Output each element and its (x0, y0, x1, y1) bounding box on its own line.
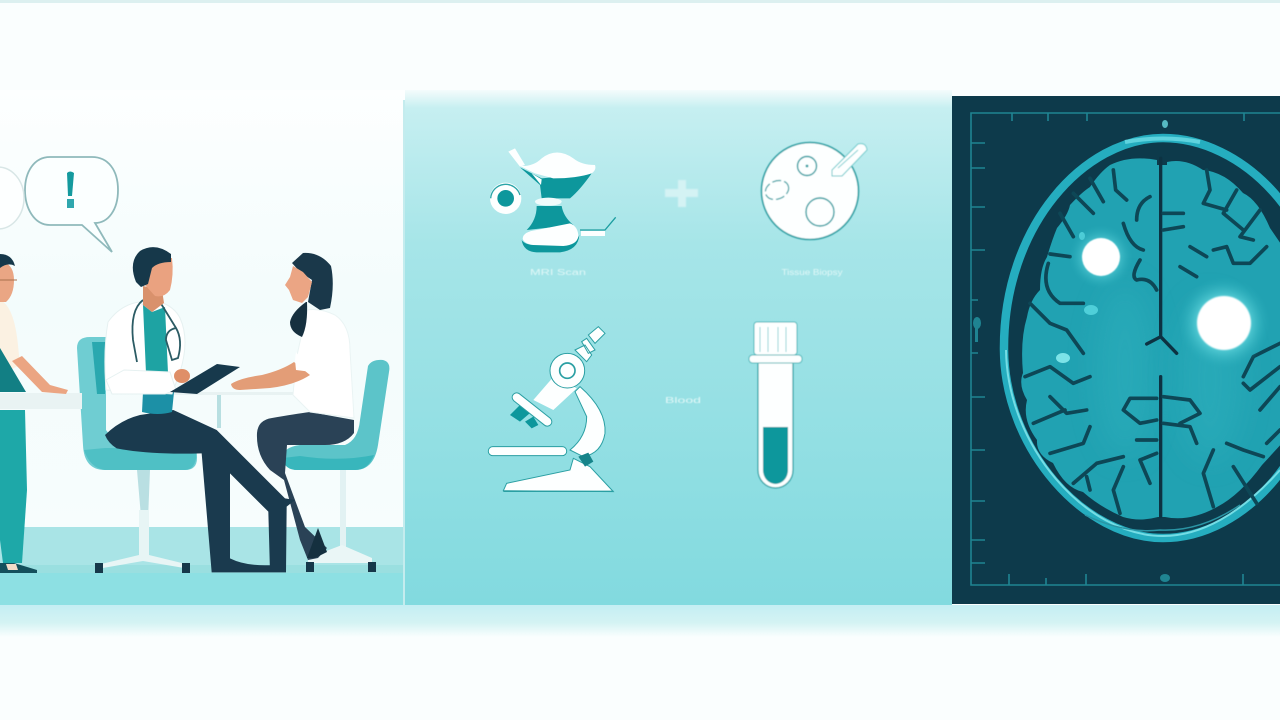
brain tissue (1021, 158, 1280, 520)
doctor scrub top (143, 305, 168, 373)
doctor hair (133, 247, 171, 287)
brain sulci (1025, 158, 1280, 517)
icon: petri dish (762, 142, 867, 240)
patient arm (231, 362, 310, 390)
doctor (105, 247, 295, 572)
small bright spots (1056, 232, 1098, 363)
icon: imaging scanner (490, 148, 616, 252)
patient hair (292, 253, 333, 310)
doctor arm (106, 370, 176, 394)
scan frame and ticks (971, 113, 1280, 585)
icon label: second: Tissue Biopsy (782, 268, 842, 277)
right chair (283, 360, 389, 572)
icon label: third: Blood (665, 396, 701, 405)
wall and floor (0, 90, 405, 605)
plus sign (665, 180, 698, 207)
left chair (77, 337, 197, 573)
patient face (285, 266, 312, 303)
speech bubble with exclamation mark (25, 157, 118, 252)
patient (231, 253, 354, 560)
brain outer ring (1004, 138, 1280, 538)
panel: consultation scene (0, 90, 405, 605)
doctor crossed legs (105, 410, 295, 572)
doctor face (145, 258, 173, 296)
icon: test tube (749, 322, 802, 488)
patient shirt (293, 310, 354, 418)
doctor scrub waist (142, 392, 174, 414)
doctor white coat (105, 302, 185, 394)
large lesion (1186, 284, 1263, 361)
patient shoe (307, 528, 327, 558)
partial speech bubble (0, 167, 24, 229)
patient ponytail (290, 302, 307, 337)
clipboard (170, 364, 240, 394)
panel: diagnostic tests (405, 90, 952, 605)
panel: brain MRI scan (952, 96, 1280, 604)
doctor hand (174, 369, 190, 383)
patient trousers (257, 412, 354, 560)
small lesion (1071, 231, 1127, 283)
patient sleeve (295, 352, 306, 372)
icon: microscope (488, 327, 613, 492)
stethoscope (132, 300, 180, 362)
left person (0, 254, 68, 573)
table (0, 392, 322, 428)
icon label: first: MRI Scan (530, 268, 586, 277)
doctor neck (143, 286, 164, 312)
